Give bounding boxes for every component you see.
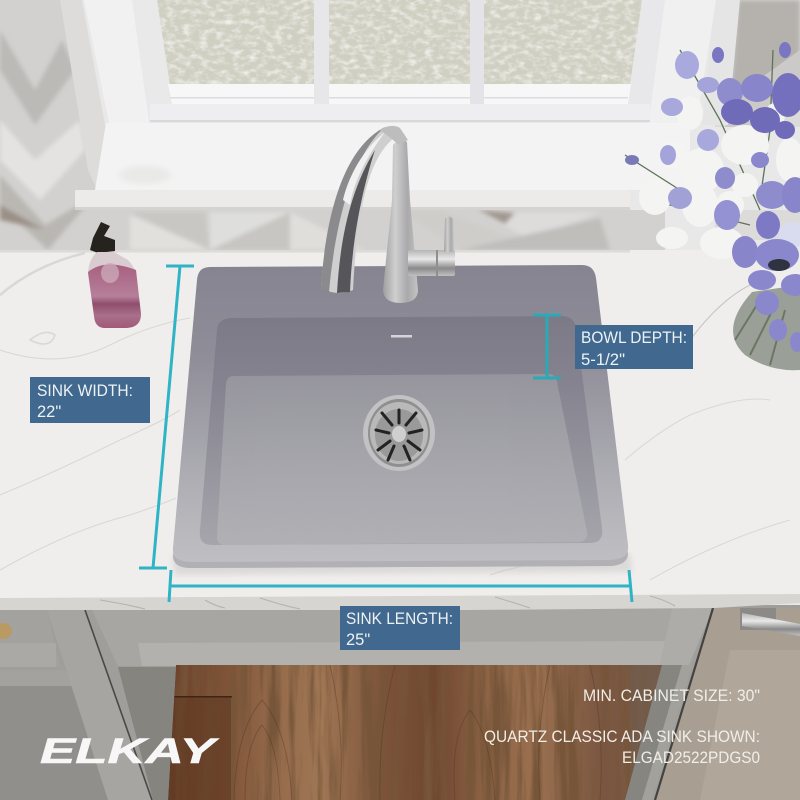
- depth line: [533, 315, 561, 378]
- length label: 25": [346, 631, 370, 649]
- width label: [30, 377, 150, 423]
- right plain wall: [640, 127, 800, 210]
- marble trim strip left: [60, 0, 106, 190]
- right cabinet door: [655, 608, 800, 800]
- text block: cabinet size and model: [484, 687, 760, 767]
- length label: [340, 606, 460, 650]
- purple blossoms: [625, 42, 800, 352]
- logo: Elkay: ELKAY: [40, 732, 219, 771]
- cabinet base colour: [0, 605, 800, 800]
- faucet body: [383, 140, 418, 303]
- length label: SINK LENGTH:: [346, 610, 453, 628]
- text block: cabinet size and model: ELGAD2522PDGS0: [622, 749, 760, 767]
- bowl floor: [217, 374, 587, 545]
- speckle grain: [200, 370, 600, 550]
- apron rail: [138, 641, 665, 666]
- sink deck: [173, 265, 628, 568]
- vase: [733, 285, 800, 370]
- depth label: BOWL DEPTH:: [581, 329, 687, 347]
- brand mark: [391, 335, 412, 338]
- marble chevron backsplash: [0, 0, 670, 250]
- bottle liquid: [88, 264, 141, 328]
- width line: [139, 266, 194, 568]
- soap bottle: [88, 222, 141, 328]
- white blossoms: [639, 96, 800, 259]
- outdoor glass: [157, 0, 642, 85]
- length line: [169, 570, 632, 602]
- flowers in vase: [625, 42, 800, 370]
- window sash bottom: [168, 84, 631, 104]
- window casing right: [628, 0, 665, 122]
- drain: [363, 395, 435, 471]
- window sill front: [75, 190, 630, 210]
- counter surface: [0, 250, 800, 600]
- sink: [173, 265, 628, 568]
- text block: cabinet size and model: QUARTZ CLASSIC ADA SINK SHOWN:: [484, 728, 760, 746]
- width label: 22": [37, 403, 61, 421]
- stems: [625, 50, 773, 225]
- right interior side: [625, 665, 682, 800]
- depth label: 5-1/2": [581, 351, 625, 369]
- brass knob: [0, 623, 12, 639]
- bowl walls: [200, 316, 602, 545]
- flower dark center: [768, 259, 790, 271]
- cabinets and floor: [0, 605, 800, 800]
- marble veins: [0, 253, 790, 609]
- dimension: sink width: [30, 266, 194, 568]
- dimension: sink length: [169, 570, 632, 650]
- wood floor: [168, 665, 690, 800]
- left cabinet door: [0, 670, 108, 800]
- text block: cabinet size and model: MIN. CABINET SIZE: 30": [583, 687, 760, 705]
- faucet spout: [321, 126, 401, 293]
- apron: [92, 608, 712, 666]
- cabinet gap dark line: [85, 610, 152, 800]
- marble trim strip and tile right: [715, 0, 800, 240]
- faucet lever: [444, 216, 454, 252]
- bottle pump: [90, 222, 115, 253]
- faucet handle body: [408, 250, 455, 276]
- depth label: [575, 325, 693, 369]
- apron stile right: [660, 608, 714, 665]
- left cabinet stile: [47, 610, 153, 800]
- sink shadow on counter: [172, 554, 632, 575]
- sink deck front lip: [173, 552, 628, 568]
- dimension: bowl depth: [533, 315, 693, 378]
- faucet: [321, 126, 455, 303]
- spout tip: [380, 126, 408, 144]
- left cabinet drawer: [0, 610, 60, 667]
- counter front edge: [0, 594, 800, 610]
- window muntins: [314, 0, 329, 104]
- window casing left: [84, 0, 150, 128]
- window sill top: [95, 123, 690, 190]
- countertop: [0, 250, 800, 610]
- left interior side: [118, 667, 176, 800]
- right cabinet dark gap: [655, 608, 713, 800]
- right cabinet handle: [740, 608, 800, 636]
- bottle glass: [88, 252, 141, 328]
- window scene: [0, 0, 800, 250]
- width label: SINK WIDTH:: [37, 382, 133, 400]
